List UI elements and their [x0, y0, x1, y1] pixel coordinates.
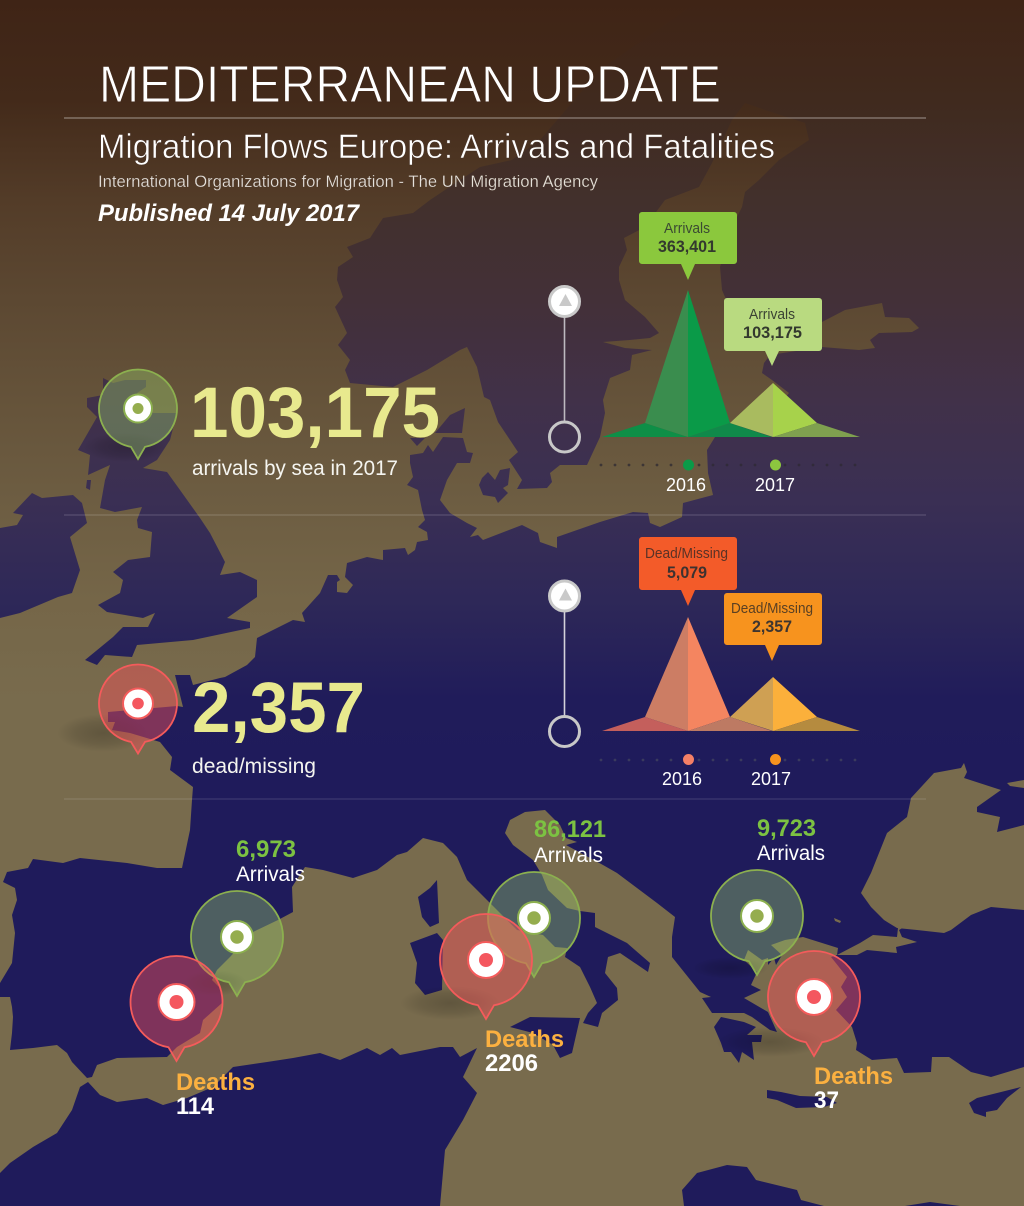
- dead/missing caption: dead/missing: [192, 755, 316, 778]
- callout: 2016 dead/missing: [639, 537, 737, 606]
- label: central arrivals: [534, 816, 606, 867]
- arrivals caption: arrivals by sea in 2017: [192, 457, 398, 480]
- icon: dead/missing pin: [99, 665, 177, 754]
- map: Danish islands and Scandinavian islets: [479, 468, 510, 503]
- label: eastern deaths: 37: [814, 1087, 839, 1114]
- chart: arrivals 2016 vs 2017: [550, 212, 860, 495]
- map: Black Sea: [861, 763, 1024, 933]
- timeline axis: [600, 754, 856, 789]
- label: eastern arrivals: [757, 815, 825, 865]
- label: western deaths: 114: [176, 1093, 215, 1120]
- 2017 arrivals peak: [730, 383, 860, 437]
- timeline axis: 2017: [751, 768, 791, 789]
- label: central arrivals: Arrivals: [534, 843, 603, 867]
- map marker: western arrivals: [191, 891, 283, 996]
- label: central deaths: 2206: [485, 1050, 538, 1077]
- pin shadows: [57, 432, 824, 1057]
- map: Great Britain: [78, 378, 257, 665]
- callout: 2017 arrivals: Arrivals: [749, 307, 795, 323]
- map: Peloponnese, Crete, Cyprus: [714, 1017, 762, 1063]
- dead/missing figure: 2,357: [192, 669, 365, 748]
- panel: dead/missing summary: [99, 665, 365, 778]
- callout: 2017 arrivals: 103,175: [743, 324, 802, 342]
- label: western deaths: [176, 1069, 255, 1120]
- label: western deaths: Deaths: [176, 1069, 255, 1096]
- label: western arrivals: Arrivals: [236, 862, 305, 886]
- map marker: central deaths: [440, 914, 532, 1019]
- label: western arrivals: 6,973: [236, 836, 296, 863]
- publication date: Published 14 July 2017: [98, 200, 361, 227]
- icon: arrivals pin: [99, 370, 177, 459]
- label: central deaths: [485, 1026, 564, 1077]
- panel: arrivals summary: [99, 370, 440, 480]
- callout: 2016 arrivals: [639, 212, 737, 280]
- 2016 dead/missing peak: [602, 617, 772, 731]
- callout: 2017 dead/missing: Dead/Missing: [731, 601, 813, 617]
- map: Azov: [1007, 780, 1024, 788]
- callout: 2017 dead/missing: 2,357: [752, 618, 792, 636]
- label: eastern deaths: [814, 1063, 893, 1114]
- label: western arrivals: [236, 836, 305, 886]
- map marker: eastern arrivals: [711, 870, 803, 975]
- callout: 2016 arrivals: 363,401: [658, 238, 716, 256]
- map: Anatolia: [831, 900, 1024, 1077]
- map marker: central arrivals: [488, 872, 580, 977]
- title: MEDITERRANEAN UPDATE: [99, 56, 721, 114]
- arrivals figure: 103,175: [190, 374, 440, 453]
- divider lines: [64, 118, 926, 799]
- slider control: [550, 581, 580, 746]
- label: eastern deaths: Deaths: [814, 1063, 893, 1090]
- map marker: western deaths: [130, 956, 222, 1061]
- callout: 2016 dead/missing: 5,079: [667, 564, 707, 582]
- callout: 2016 arrivals: Arrivals: [664, 221, 710, 237]
- map: Corsica, Sardinia, Sicily: [418, 880, 439, 927]
- callout: 2016 dead/missing: Dead/Missing: [645, 546, 728, 562]
- map: Ireland: [0, 493, 87, 618]
- subtitle: Migration Flows Europe: Arrivals and Fatalities: [98, 128, 775, 166]
- source line: International Organizations for Migration - The UN Migration Agency: [98, 173, 599, 191]
- chart: dead/missing 2016 vs 2017: [550, 537, 860, 789]
- 2016 arrivals peak: [602, 290, 772, 437]
- timeline axis: [600, 460, 856, 495]
- label: central arrivals: 86,121: [534, 816, 606, 843]
- timeline axis: 2017: [755, 474, 795, 495]
- 2017 dead/missing peak: [730, 677, 860, 731]
- label: central deaths: Deaths: [485, 1026, 564, 1053]
- label: eastern arrivals: Arrivals: [757, 841, 825, 865]
- timeline axis: 2016: [666, 474, 706, 495]
- timeline axis: 2016: [662, 768, 702, 789]
- slider control: [550, 286, 580, 452]
- callout: 2017 dead/missing: [724, 593, 822, 661]
- label: eastern arrivals: 9,723: [757, 815, 816, 842]
- map marker: eastern deaths: [768, 951, 860, 1056]
- callout: 2017 arrivals: [724, 298, 822, 366]
- map: North Africa: [0, 1047, 477, 1206]
